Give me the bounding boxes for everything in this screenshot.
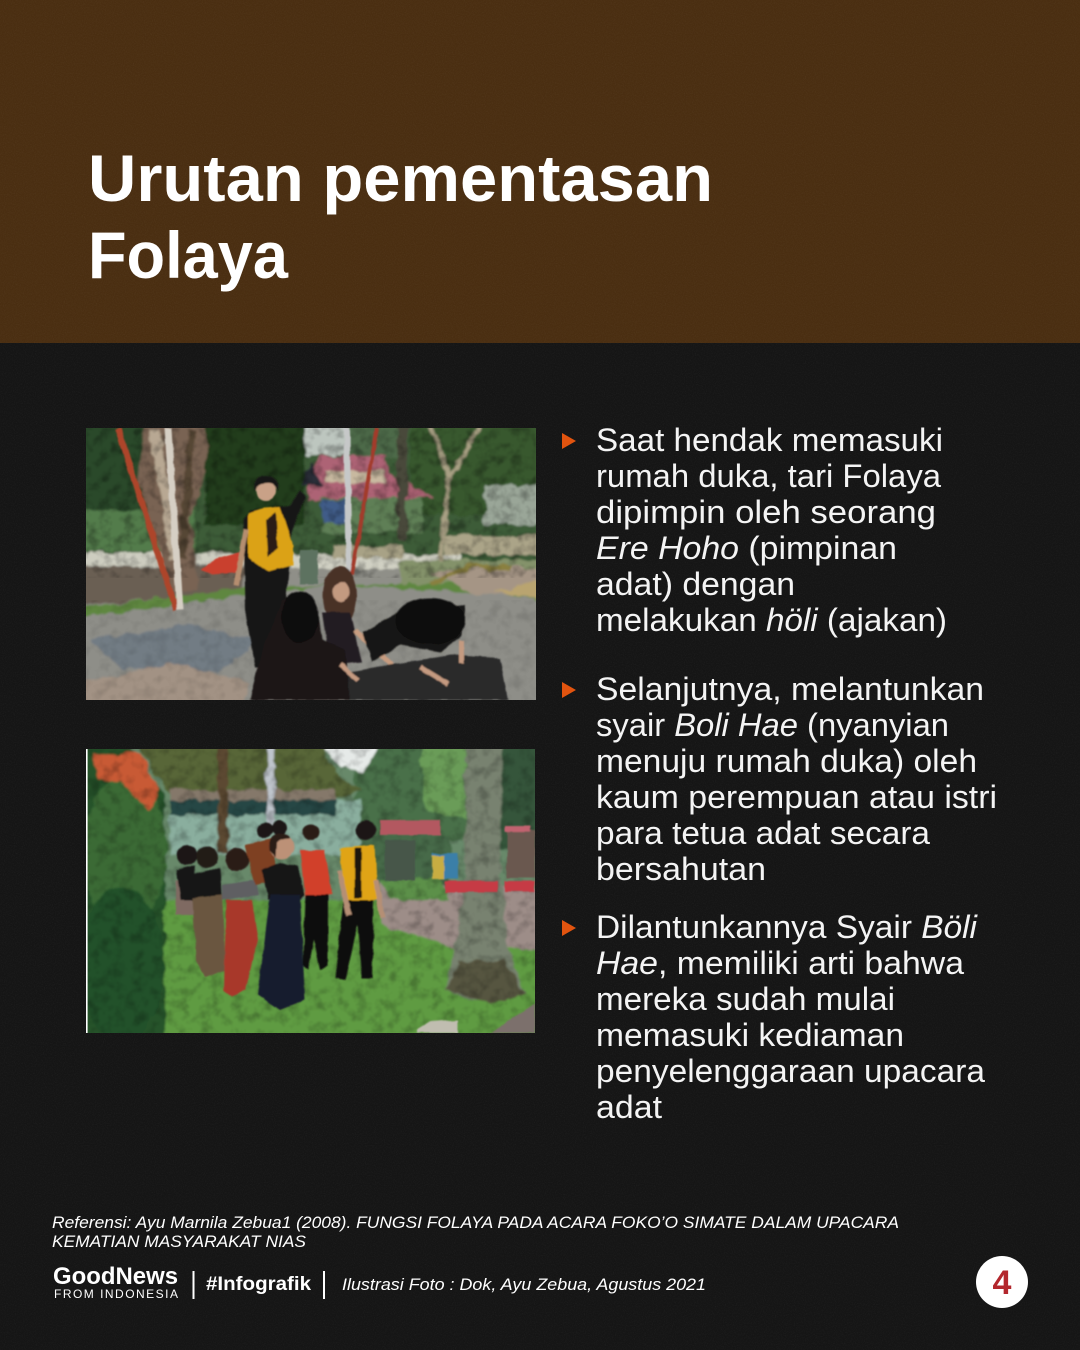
bullet 1: saat hendak memasuki: rumah duka, tari Folaya bbox=[596, 458, 941, 494]
bullet 2: selanjutnya: bersahutan bbox=[596, 851, 766, 887]
header band bbox=[0, 0, 1080, 343]
bullet 1: saat hendak memasuki bbox=[562, 422, 947, 638]
photo: dancers walking across grass bbox=[86, 749, 535, 1033]
bullet 2: selanjutnya: Selanjutnya, melantunkan bbox=[596, 671, 984, 707]
bullet 1: saat hendak memasuki: Saat hendak memasuki bbox=[596, 422, 943, 458]
bullet 3: dilantunkannya: penyelenggaraan upacara bbox=[596, 1053, 985, 1089]
bullet 2: selanjutnya: kaum perempuan atau istri bbox=[596, 779, 997, 815]
page number badge bbox=[976, 1256, 1028, 1308]
photo credit: Ilustrasi Foto : Dok, Ayu Zebua, Agustus 2021 bbox=[342, 1275, 706, 1294]
logo: GoodNews from Indonesia: GoodNews bbox=[53, 1263, 178, 1290]
title: Folaya bbox=[88, 218, 289, 292]
hashtag: #Infografik bbox=[206, 1274, 311, 1295]
bullet 1: saat hendak memasuki: dipimpin oleh seorang bbox=[596, 494, 936, 530]
photo: Ere Hoho leading dancers in a park bbox=[86, 428, 536, 700]
bullet 2: selanjutnya: para tetua adat secara bbox=[596, 815, 930, 851]
title bbox=[88, 141, 713, 292]
logo: GoodNews from Indonesia: FROM INDONESIA bbox=[54, 1287, 178, 1301]
reference text: KEMATIAN MASYARAKAT NIAS bbox=[52, 1232, 307, 1251]
bullet 3: dilantunkannya: mereka sudah mulai bbox=[596, 981, 895, 1017]
page number badge: 4 bbox=[993, 1264, 1012, 1302]
bullet 2: selanjutnya bbox=[562, 671, 997, 887]
bullet 1: saat hendak memasuki: melakukan höli (ajakan) bbox=[596, 602, 947, 638]
bullet 1: saat hendak memasuki: Ere Hoho (pimpinan bbox=[596, 530, 897, 566]
bullet list bbox=[562, 422, 997, 1125]
bullet 3: dilantunkannya: Dilantunkannya Syair Böli bbox=[596, 909, 978, 945]
bullet 2: selanjutnya: syair Boli Hae (nyanyian bbox=[596, 707, 949, 743]
bullet 3: dilantunkannya: memasuki kediaman bbox=[596, 1017, 904, 1053]
reference text: Referensi: Ayu Marnila Zebua1 (2008). FUNGSI FOLAYA PADA ACARA FOKO’O SIMATE DALAM UPACARA bbox=[52, 1213, 899, 1232]
bullet 3: dilantunkannya bbox=[562, 909, 985, 1125]
reference text bbox=[52, 1213, 899, 1251]
bullet 3: dilantunkannya: adat bbox=[596, 1089, 662, 1125]
bullet 2: selanjutnya: menuju rumah duka) oleh bbox=[596, 743, 977, 779]
title: Urutan pementasan bbox=[88, 141, 713, 215]
bullet 3: dilantunkannya: Hae, memiliki arti bahwa bbox=[596, 945, 964, 981]
bullet 1: saat hendak memasuki: adat) dengan bbox=[596, 566, 795, 602]
